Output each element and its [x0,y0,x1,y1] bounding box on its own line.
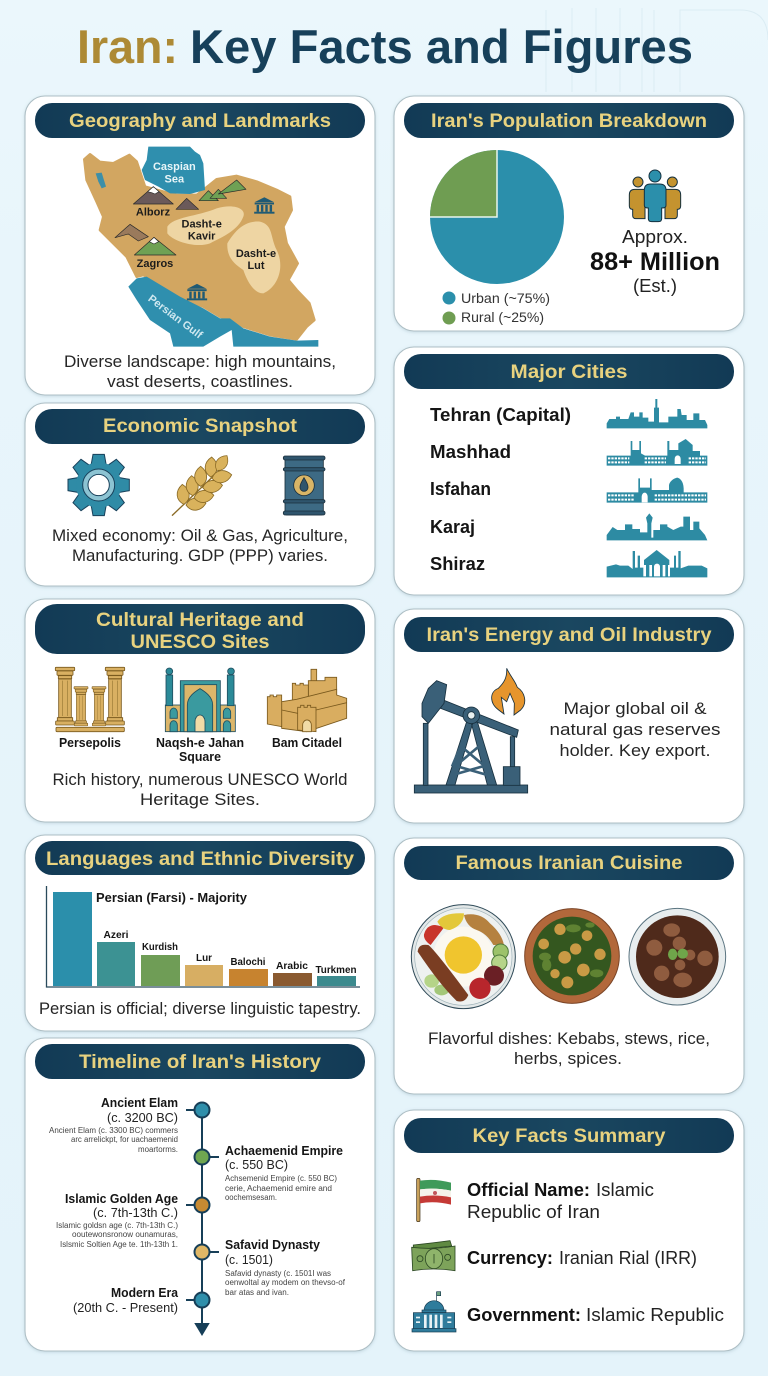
city names: Mashhad [430,442,511,462]
event: Ancient Elam: moartorms. [138,1145,178,1154]
text: heritage description: Heritage Sites. [140,791,260,809]
bar chart: languages [46,886,360,987]
map of Iran: Dasht-e [182,218,222,230]
map of Iran: Caspian [153,161,196,173]
panel: geography and landmarks [25,96,375,395]
event: Safavid Dynasty: (c. 1501) [225,1253,273,1267]
timeline axis and nodes [186,1102,219,1334]
event: Islamic Golden Age: Islsmic Soltien Age te. 1th-13th 1. [60,1240,178,1249]
heading: cultural: Cultural Heritage and [96,609,304,631]
event: Modern Era: (20th C. - Present) [73,1301,178,1315]
pie chart: urban and rural [430,150,564,284]
city names: Shiraz [430,554,485,574]
text: geography description [64,353,336,391]
icon: government building [412,1292,456,1332]
map of Iran: Alborz [136,206,171,218]
city names: Karaj [430,517,475,537]
icon: wheat [172,452,233,516]
text: energy description: holder. Key export. [560,742,710,760]
event: Achaemenid Empire [225,1144,343,1202]
map of Iran: Lut [247,260,265,272]
text: official name: Official Name: [467,1180,590,1200]
event: Ancient Elam: Ancient Elam (c. 3300 BC) commers [49,1126,178,1135]
event: Islamic Golden Age: Islamic Golden Age [65,1192,178,1206]
icon: kebab plate [411,905,515,1009]
text: official name: Republic of Iran [467,1202,600,1222]
icon: banknotes [412,1241,455,1271]
text: cuisine description: herbs, spices. [514,1050,622,1068]
event: Islamic Golden Age: (c. 7th-13th C.) [93,1206,178,1220]
stat: population total: (Est.) [633,276,677,296]
text: languages description: Persian is official; diverse linguistic tapestry. [39,1000,361,1018]
labels: heritage sites: Square [179,750,221,764]
heading: economic: Economic Snapshot [103,415,298,437]
text: currency: Currency: [467,1248,553,1268]
event: Ancient Elam [49,1096,178,1154]
event: Islamic Golden Age [56,1192,178,1249]
text: cuisine description [428,1030,710,1068]
text: currency [467,1248,697,1268]
heading: geography [35,103,365,138]
labels: heritage sites [59,736,342,764]
panel: population breakdown [394,96,744,331]
panel: languages and ethnic diversity [25,835,375,1031]
text: currency: Iranian Rial (IRR) [559,1248,697,1268]
map of Iran: Sea [165,173,185,185]
stat: population total [590,227,720,296]
event: Safavid Dynasty [225,1238,346,1297]
map of Iran: Zagros [137,258,173,270]
bar chart: languages: Balochi [230,956,266,968]
icon: flag of Iran [417,1178,451,1222]
map of Iran [84,147,318,347]
icon: oil pumpjack and flame [414,668,528,793]
text: geography description: Diverse landscape: high mountains, [64,353,336,371]
text: government [467,1305,724,1325]
panel: energy and oil industry [394,609,744,823]
text: government: Islamic Republic [586,1305,724,1325]
event: Achaemenid Empire: cerie, Achaemenid emire and [225,1184,332,1193]
map of Iran: Kavir [188,230,216,242]
text: energy description [550,700,720,760]
heading: population [404,103,734,138]
event: Achaemenid Empire: Achsemenid Empire (c. 550 BC) [225,1174,337,1183]
text: official name [467,1180,654,1222]
heading: timeline: Timeline of Iran's History [79,1051,321,1073]
event: Safavid Dynasty: bar atas and ivan. [225,1288,289,1297]
panel: timeline of Iran's history [25,1038,375,1351]
labels: heritage sites: Bam Citadel [272,736,342,750]
city names: Tehran (Capital) [430,405,571,425]
heading: cuisine [404,846,734,880]
panel: major cities [394,347,744,595]
icon: oil barrel [283,456,325,515]
icons: economy [68,452,325,516]
panel: economic snapshot [25,403,375,586]
text: geography description: vast deserts, coastlines. [107,373,293,391]
icon: gear [68,454,129,516]
event: Modern Era: Modern Era [111,1286,179,1300]
city names: Isfahan [430,479,491,499]
icon: stew bowl [629,908,726,1005]
heading: timeline [35,1044,365,1079]
heading: cultural [35,604,365,654]
title: Key Facts and Figures [190,20,693,73]
map of Iran: Persian Gulf [146,293,205,342]
text: economic description: Manufacturing. GDP (PPP) varies. [72,547,328,565]
event: Ancient Elam: Ancient Elam [101,1096,178,1110]
text: heritage description [52,771,348,809]
city names [430,405,571,574]
event: Ancient Elam: (c. 3200 BC) [107,1111,178,1125]
bar chart: languages: Azeri [104,929,129,941]
legend: urban and rural [442,290,550,325]
text: energy description: natural gas reserves [550,721,720,739]
labels: heritage sites: Naqsh-e Jahan [156,736,244,750]
panel: famous Iranian cuisine [394,838,744,1094]
bar chart: languages: Lur [196,952,212,964]
heading: summary: Key Facts Summary [472,1125,666,1147]
text: cuisine description: Flavorful dishes: Kebabs, stews, rice, [428,1030,710,1048]
bar chart: languages: Kurdish [142,941,178,953]
text: economic description [52,527,348,565]
heading: geography: Geography and Landmarks [69,110,331,132]
heading: summary [404,1118,734,1153]
title: Iran: [77,20,178,73]
event: Safavid Dynasty: oenwoltal ay modem on thevso-of [225,1278,346,1287]
icons: heritage sites [55,667,347,732]
heading: population: Iran's Population Breakdown [431,110,707,132]
icon: people [629,170,681,222]
heading: languages: Languages and Ethnic Diversity [46,848,354,870]
text: official name: Islamic [596,1180,654,1200]
legend: urban and rural: Urban (~75%) [461,290,550,306]
event: Safavid Dynasty: Safavid Dynasty [225,1238,320,1252]
heading: cuisine: Famous Iranian Cuisine [456,852,683,874]
heading: cities [404,354,734,389]
text: heritage description: Rich history, numerous UNESCO World [52,771,348,789]
icon: ghormeh sabzi bowl [525,909,619,1003]
heading: languages [35,841,365,875]
event: Ancient Elam: arc arrelickpt, for uachaemenid [71,1135,178,1144]
icons: city skylines [607,399,707,577]
heading: cultural: UNESCO Sites [130,631,270,653]
event: Achaemenid Empire: Achaemenid Empire [225,1144,343,1158]
heading: energy [404,617,734,652]
illustration: dishes [411,905,726,1009]
text: government: Government: [467,1305,581,1325]
event: Achaemenid Empire: (c. 550 BC) [225,1158,288,1172]
event: Achaemenid Empire: oochemsesam. [225,1193,277,1202]
legend: urban and rural: Rural (~25%) [461,309,544,325]
event: Islamic Golden Age: Islamic goldsn age (c. 7th-13th C.) [56,1221,178,1230]
event: Islamic Golden Age: ooutewonsronow ounamuras, [72,1230,178,1239]
heading: economic [35,409,365,444]
map of Iran: Dasht-e [236,248,276,260]
labels: heritage sites: Persepolis [59,736,121,750]
bar chart: languages: Arabic [276,960,308,972]
text: economic description: Mixed economy: Oil & Gas, Agriculture, [52,527,348,545]
stat: population total: 88+ Million [590,248,720,276]
icon: Bam Citadel [267,669,347,732]
event: Safavid Dynasty: Safavid dynasty (c. 1501I was [225,1269,331,1278]
stat: population total: Approx. [622,227,688,247]
icon: Persepolis columns [55,667,125,732]
panel: key facts summary [394,1110,744,1351]
panel: cultural heritage and UNESCO sites [25,599,375,822]
heading: cities: Major Cities [510,361,628,383]
text: energy description: Major global oil & [564,700,706,718]
bar chart: languages: Persian (Farsi) - Majority [96,891,247,905]
bar chart: languages: Turkmen [316,964,356,976]
heading: energy: Iran's Energy and Oil Industry [426,624,712,646]
event: Modern Era [73,1286,179,1315]
icon: Naqsh-e Jahan mosque [165,668,235,732]
